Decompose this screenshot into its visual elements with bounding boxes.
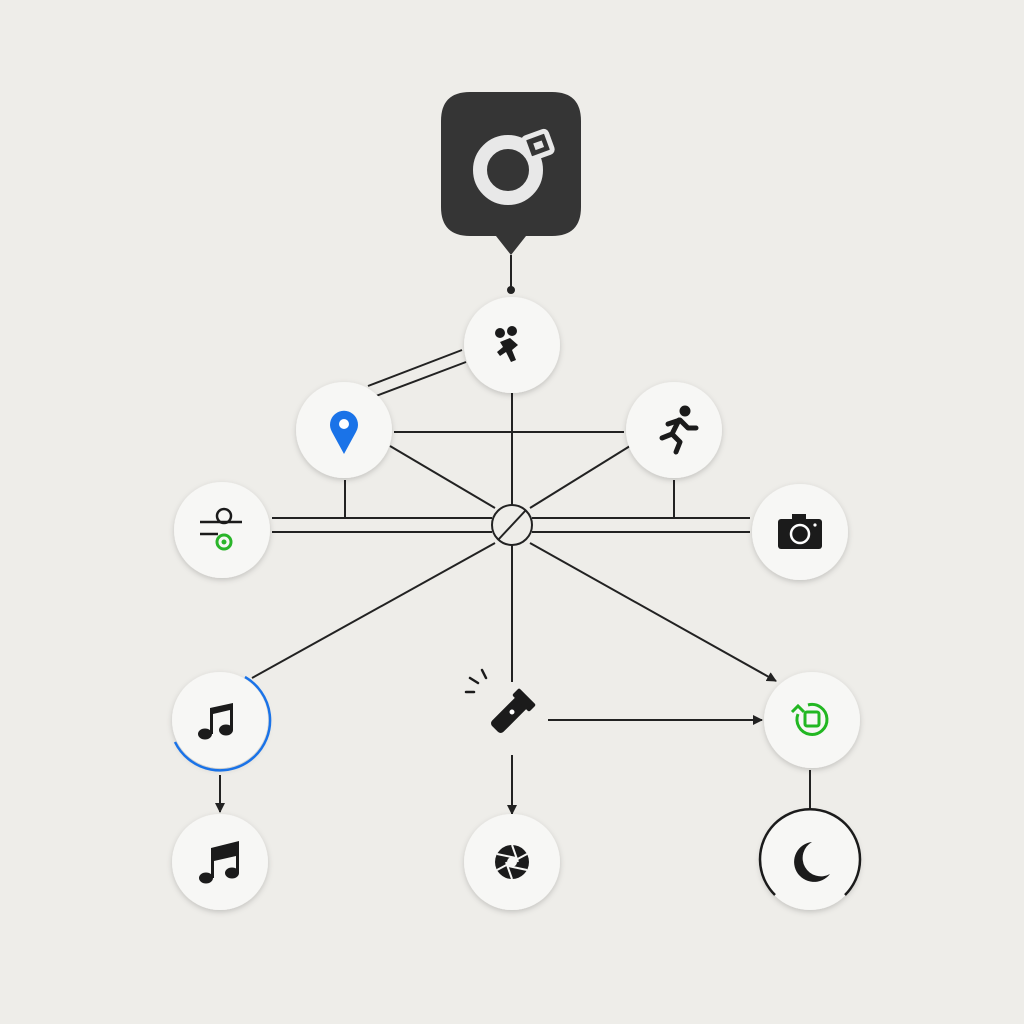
node: moon bbox=[760, 810, 860, 910]
node: aperture bbox=[464, 814, 560, 910]
connector lines bbox=[220, 255, 810, 814]
node: music 2 bbox=[172, 814, 268, 910]
node: camera bbox=[752, 484, 848, 580]
flashlight bbox=[466, 670, 536, 737]
node: activity top bbox=[464, 297, 560, 393]
node: rotate bbox=[764, 672, 860, 768]
node: settings bbox=[174, 482, 270, 578]
node: runner bbox=[626, 382, 722, 478]
app icon bbox=[441, 92, 581, 255]
node: music 1 bbox=[172, 672, 268, 768]
hub bbox=[492, 505, 532, 545]
node: location bbox=[296, 382, 392, 478]
